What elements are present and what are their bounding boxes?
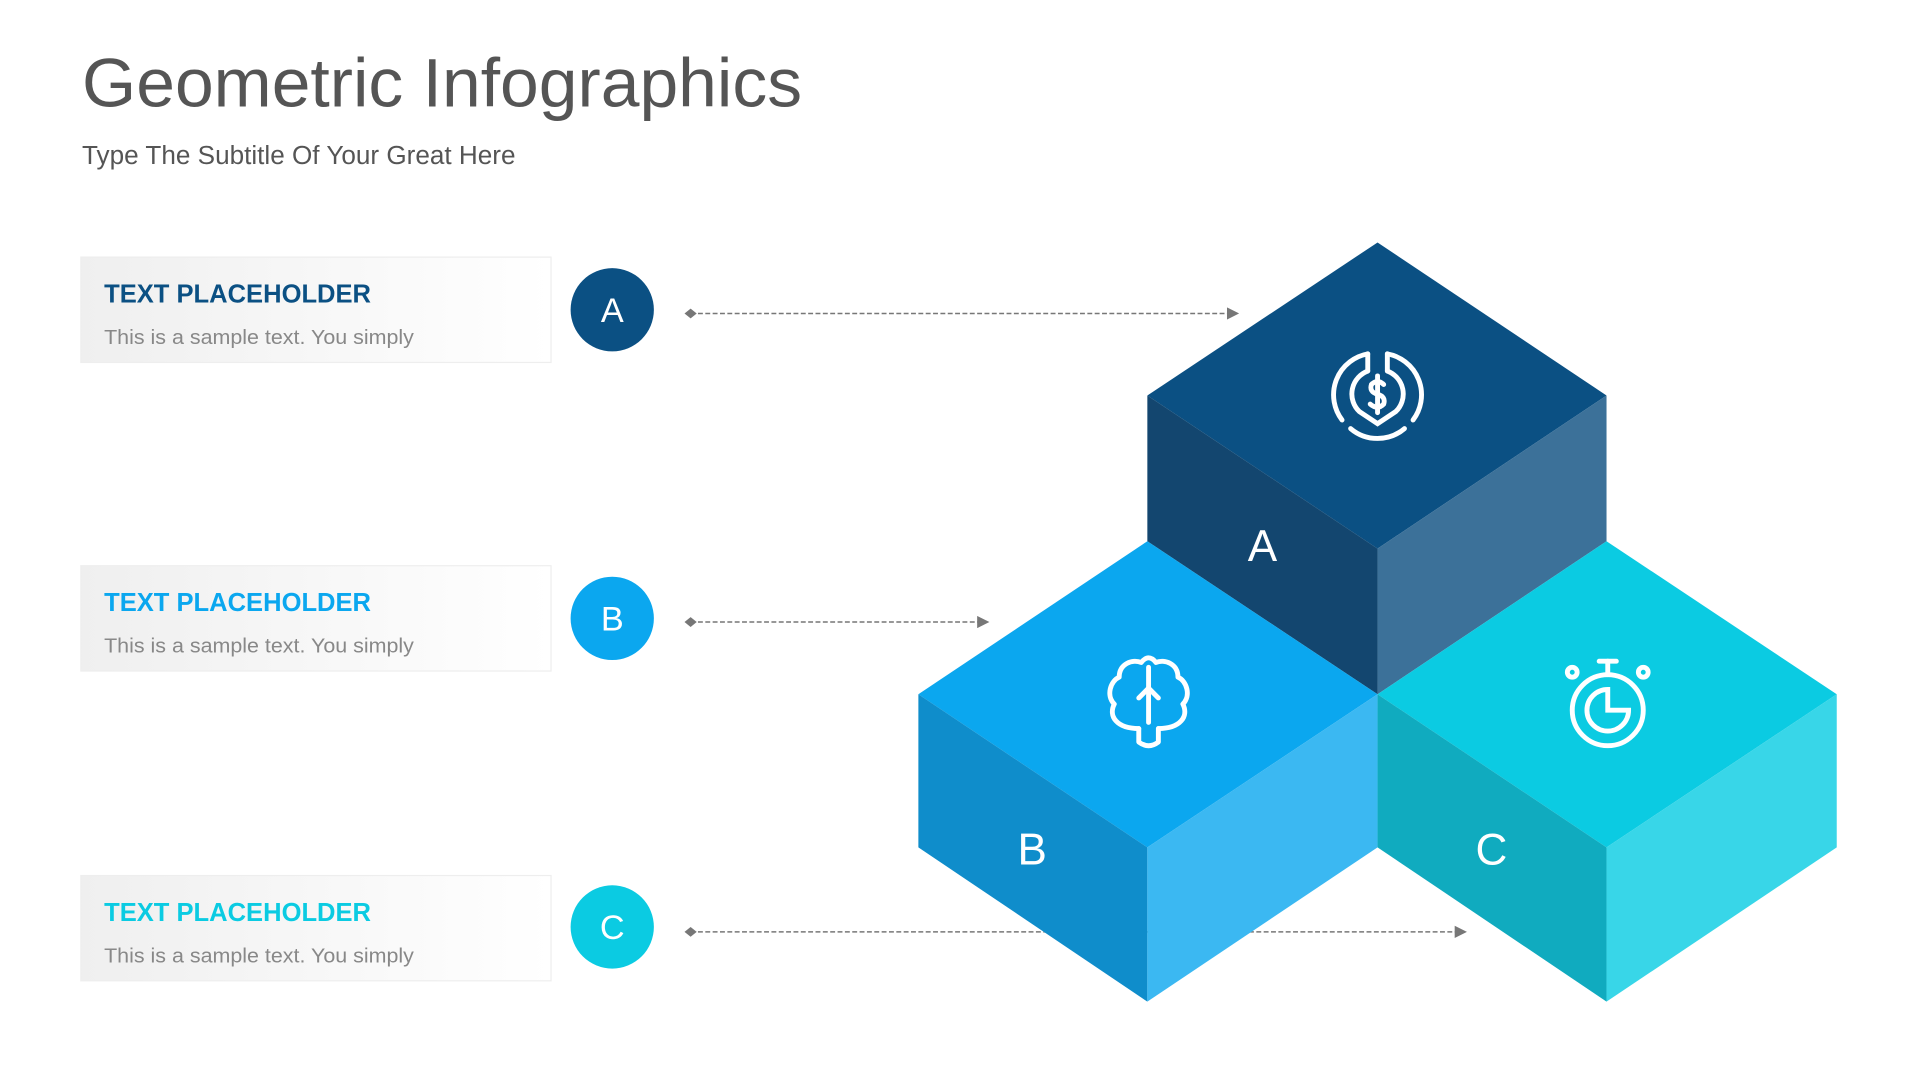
icon: brain xyxy=(1110,658,1187,746)
circle C xyxy=(571,885,654,969)
heading C: TEXT PLACEHOLDER xyxy=(104,899,371,927)
circle C: C xyxy=(600,909,625,947)
heading B: TEXT PLACEHOLDER xyxy=(104,589,371,617)
body C: This is a sample text. You simply xyxy=(104,945,415,967)
arrow A xyxy=(684,309,1237,318)
circle A xyxy=(571,268,654,351)
cube A xyxy=(1147,242,1607,694)
icon: stopwatch xyxy=(1567,661,1648,746)
panel: text box B xyxy=(81,566,551,671)
heading A: TEXT PLACEHOLDER xyxy=(104,280,371,308)
cube B xyxy=(918,541,1378,1002)
arrow C xyxy=(684,927,1464,937)
label B: B xyxy=(1018,825,1047,874)
circle B xyxy=(571,577,654,660)
circle A: A xyxy=(601,292,624,330)
body B: This is a sample text. You simply xyxy=(104,636,415,658)
panel: text box A xyxy=(81,257,551,362)
body A: This is a sample text. You simply xyxy=(104,327,415,349)
cube C xyxy=(1378,541,1837,1002)
label C: C xyxy=(1476,825,1507,874)
title: Geometric Infographics xyxy=(82,45,802,122)
label A: A xyxy=(1248,522,1278,571)
circle B: B xyxy=(601,601,624,639)
arrow B xyxy=(684,617,987,627)
icon: dollar gauge xyxy=(1334,354,1422,438)
panel: text box C xyxy=(81,876,551,981)
subtitle: Type The Subtitle Of Your Great Here xyxy=(82,142,516,170)
